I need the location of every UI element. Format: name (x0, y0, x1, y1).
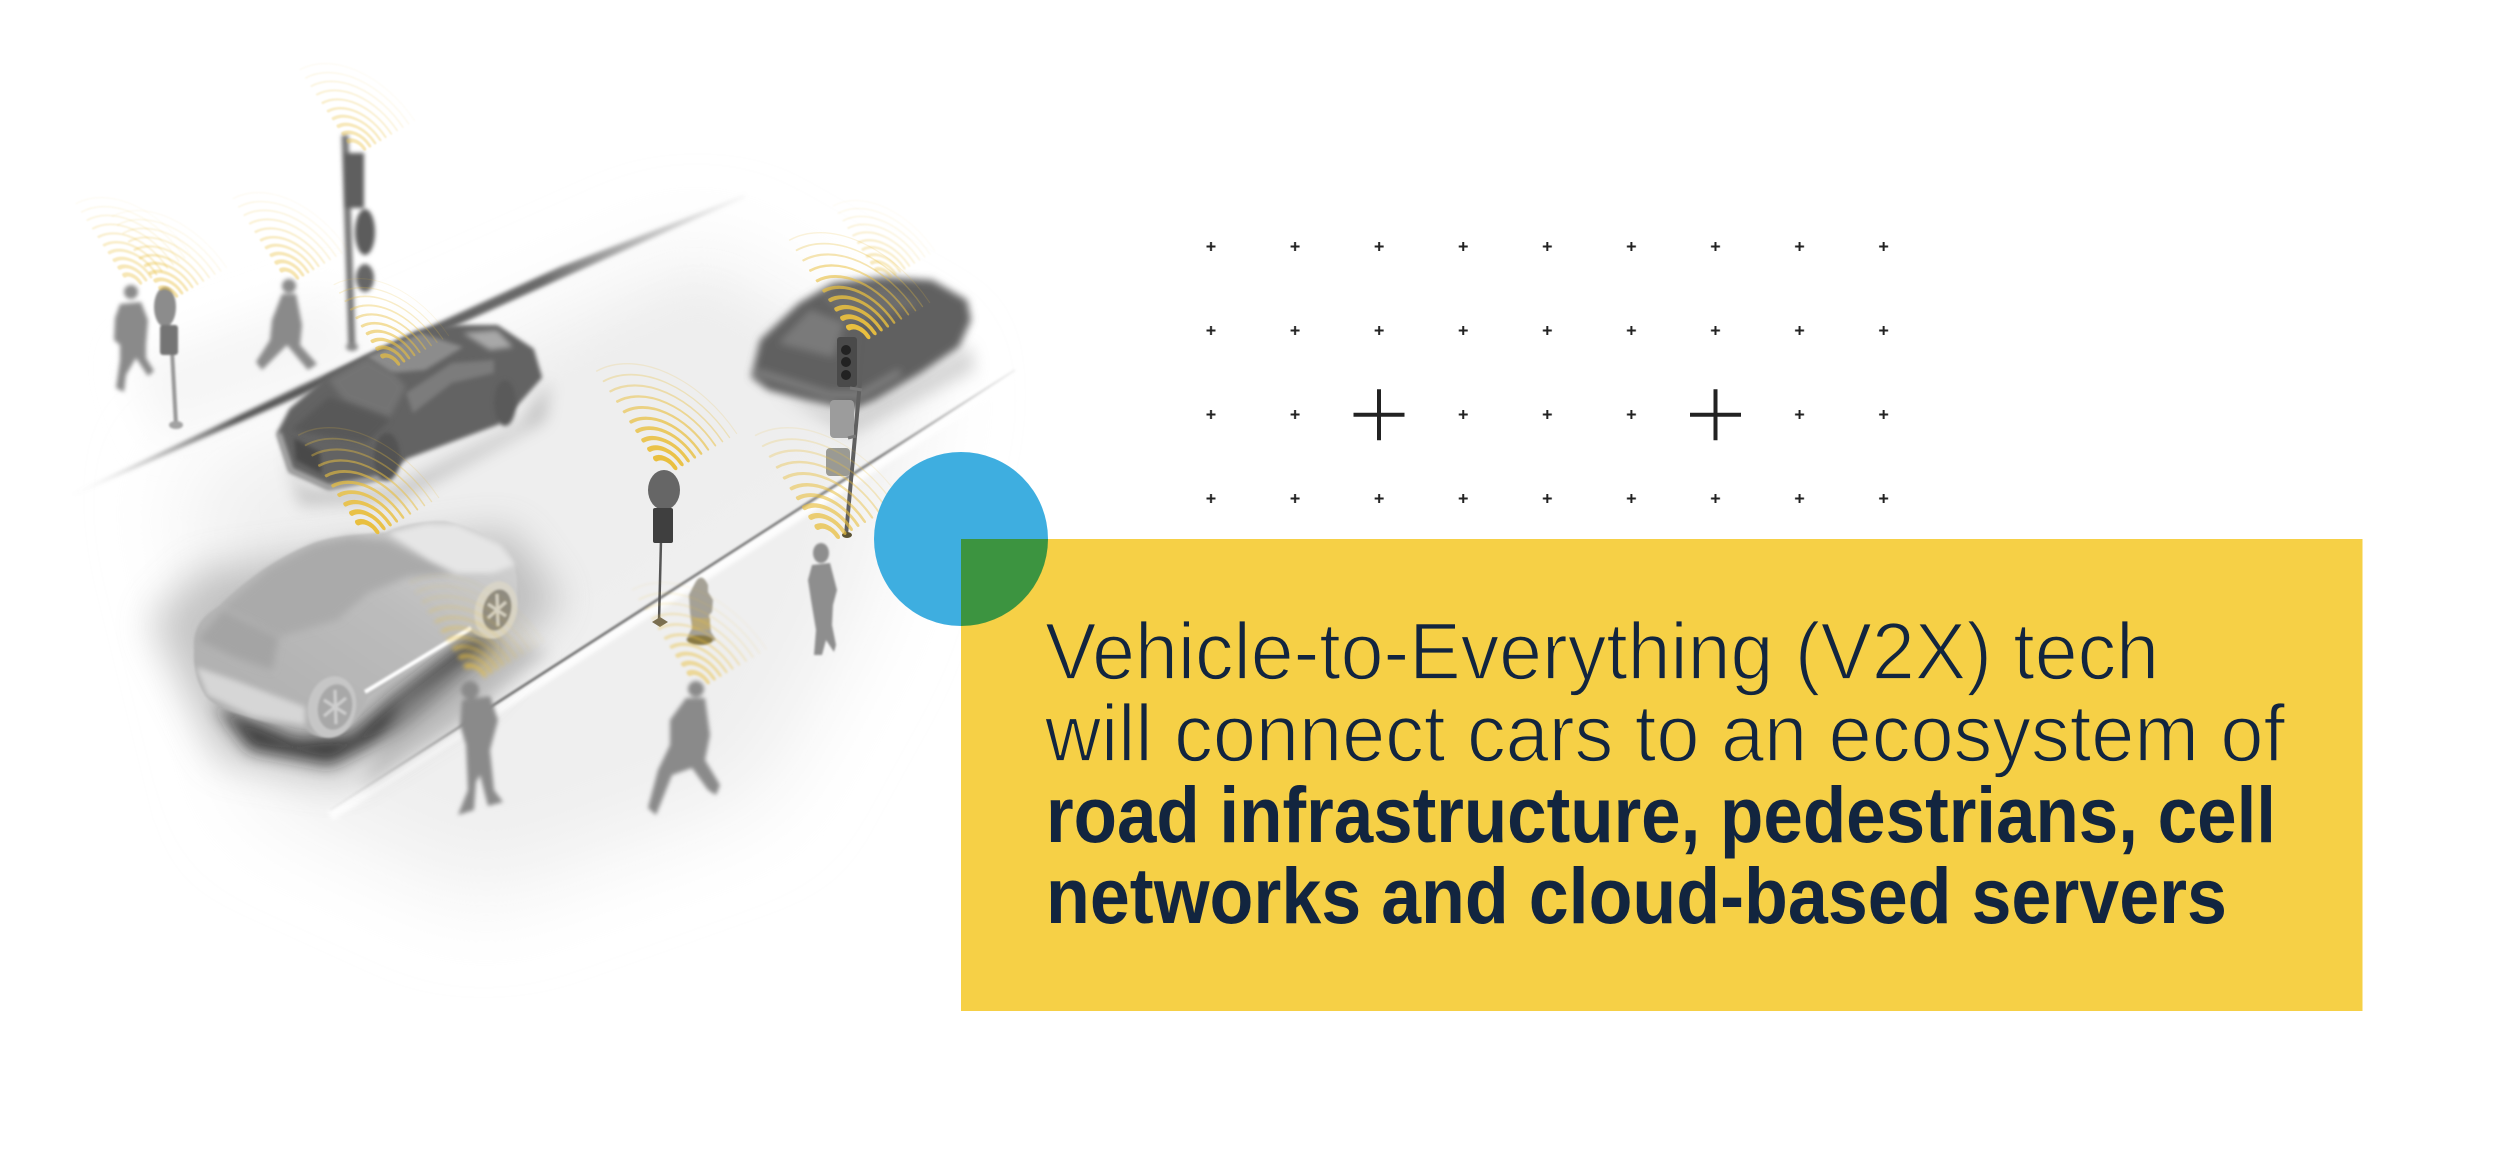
headline text (1044, 607, 2285, 940)
wave: person 2 (232, 175, 348, 299)
wave: left pole (299, 46, 415, 170)
upper curb (70, 195, 745, 496)
person 1 (114, 285, 154, 392)
sedan rear glass (463, 330, 513, 350)
fire hydrant (686, 578, 716, 645)
headline text: road infrastructure, pedestrians, cell (1046, 770, 2276, 859)
car rear wheel (302, 672, 362, 742)
sedan bumper rim (279, 433, 383, 487)
person 4 (648, 681, 720, 815)
far car bumper (756, 372, 900, 395)
green overlap (961, 539, 1048, 626)
sedan rear wheel (494, 380, 516, 426)
sedan windshield (329, 358, 406, 417)
wave: far car overlay (832, 185, 936, 295)
wave: sign (595, 342, 737, 494)
headline text: Vehicle-to-Everything (V2X) tech (1045, 607, 2159, 697)
street scene illustration (70, 46, 1015, 900)
person 5 (458, 681, 503, 815)
wave: traffic light (788, 211, 930, 363)
wave: person 1 (75, 180, 191, 304)
ground plane (130, 250, 930, 900)
plus grid decoration (1169, 204, 1926, 540)
car: far dark car (751, 277, 971, 410)
signal waves (75, 46, 936, 707)
large plus 2 (1690, 389, 1741, 440)
wave: person 5 (408, 555, 544, 700)
shadow: far car (775, 345, 975, 435)
sedan hood (291, 397, 390, 443)
person 2 (256, 279, 317, 370)
wave: sedan roof (333, 261, 449, 385)
car front wheel (469, 577, 523, 643)
lower curb (330, 370, 1015, 816)
car: dark sedan (279, 327, 540, 487)
shadow: dark sedan (285, 380, 550, 505)
far car rear window (779, 310, 844, 357)
sign post (648, 470, 680, 627)
wave: woman (754, 405, 902, 564)
wave: person 4 (631, 562, 767, 707)
yellow panel (961, 539, 2362, 1011)
headline text: networks and cloud-based servers (1046, 851, 2227, 940)
large plus 1 (1354, 389, 1404, 440)
wave: SUV (297, 406, 439, 558)
car sill highlight (365, 628, 471, 692)
car: silver SUV (194, 521, 523, 742)
far car roof (820, 285, 920, 325)
wave: parking meter (111, 193, 227, 317)
parking meter (154, 287, 183, 429)
car hood (388, 524, 515, 573)
person 3: woman (808, 543, 837, 655)
car bumper (196, 667, 305, 725)
sedan side windows (406, 360, 494, 413)
car glass band (223, 537, 453, 637)
car rear hatch (198, 610, 279, 670)
sedan front wheel (374, 433, 400, 481)
sedan roof (367, 333, 463, 373)
headline text: will connect cars to an ecosystem of (1044, 689, 2285, 779)
sedan grille (294, 438, 322, 474)
shadow: silver SUV (150, 530, 560, 790)
blue circle (874, 452, 1048, 626)
traffic light pole (826, 327, 865, 538)
left signal pole (344, 135, 375, 351)
